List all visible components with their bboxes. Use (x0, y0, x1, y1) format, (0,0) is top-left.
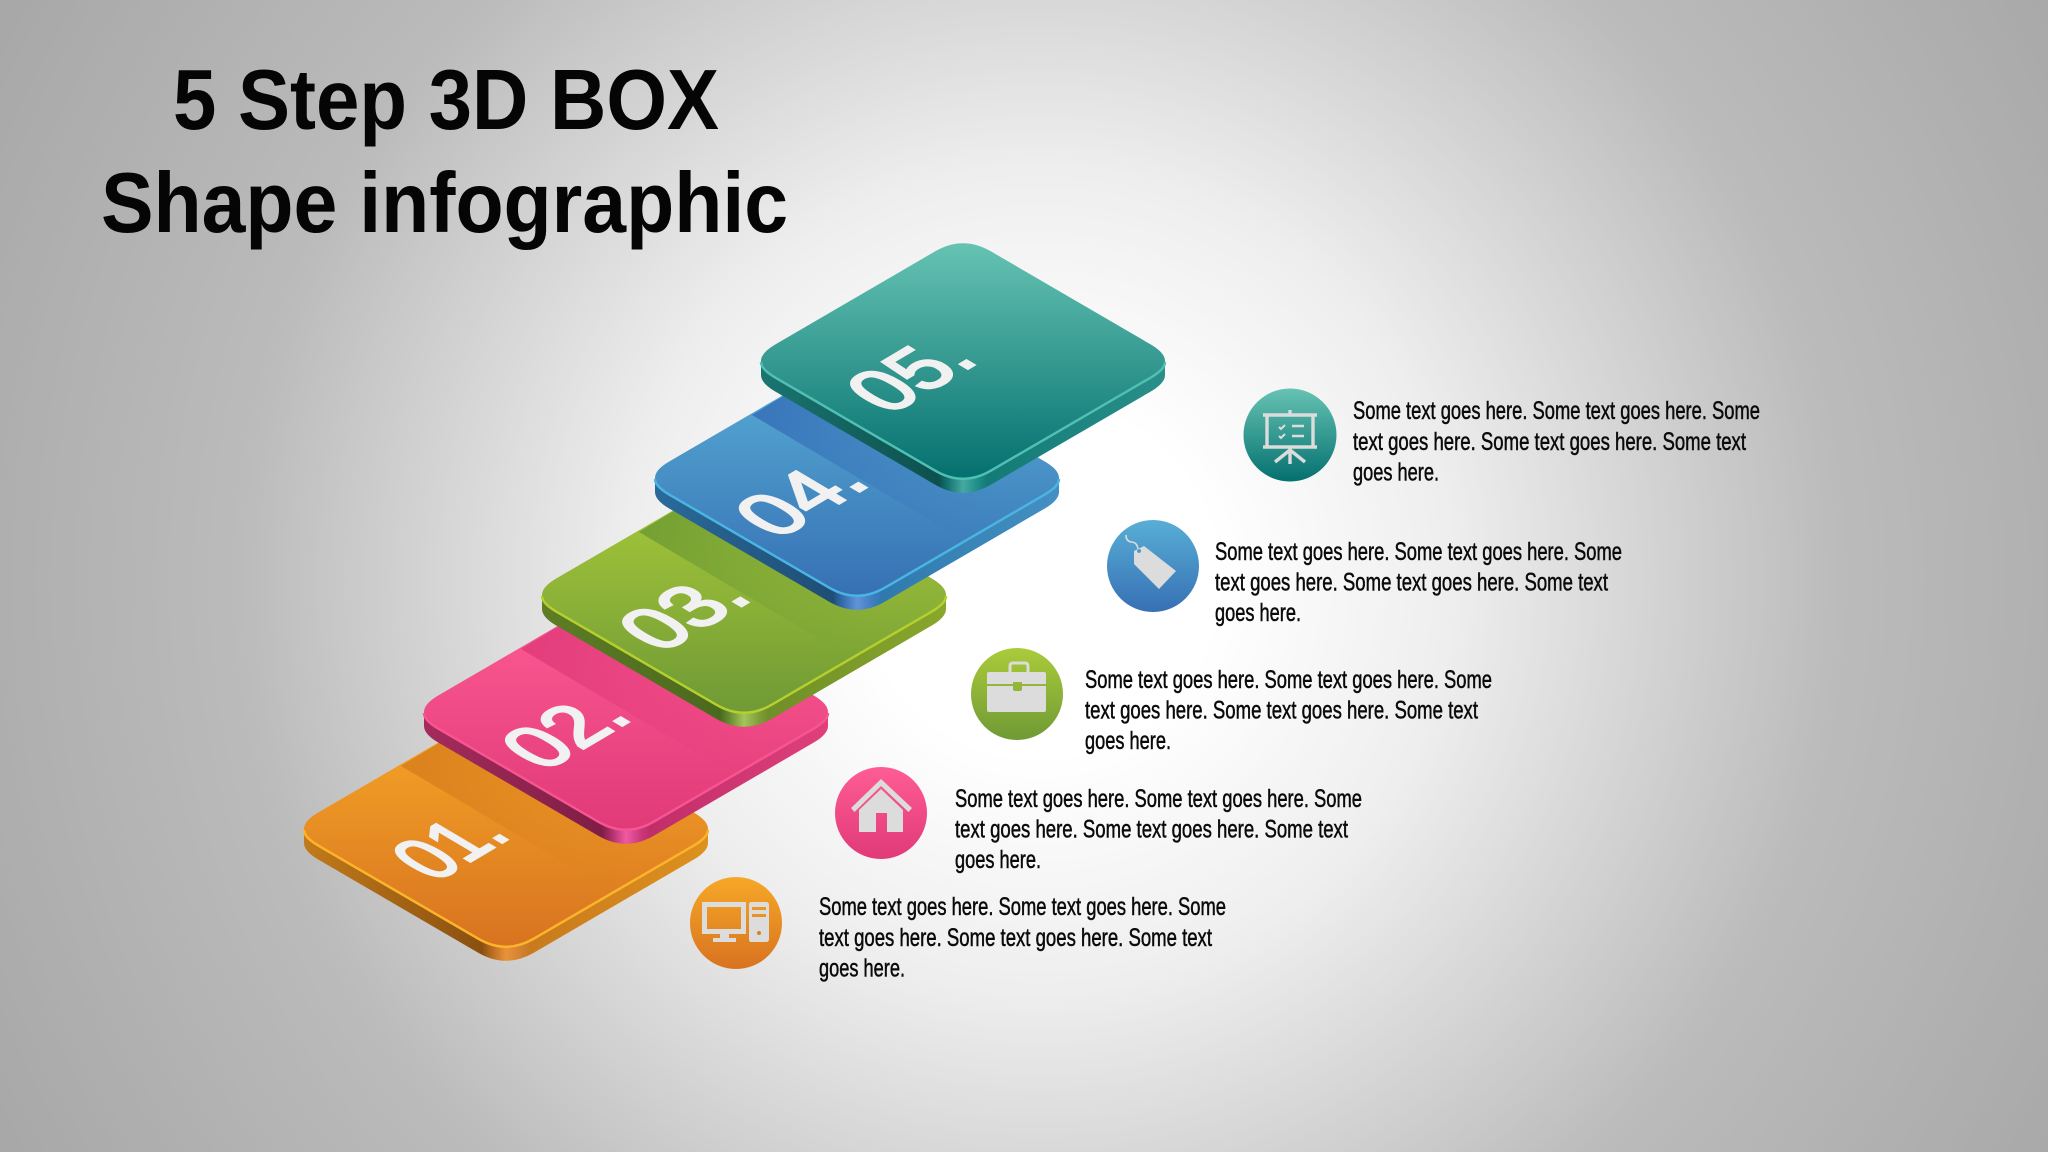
box: step 02: 02. (481, 681, 650, 781)
text: step 03: text goes here. Some text goes here. Some text (1085, 696, 1478, 724)
text: step 02: goes here. (955, 846, 1041, 874)
text: step 03 (1085, 666, 1492, 755)
box: step 04: 04. (715, 447, 888, 549)
text: step 02 (955, 785, 1362, 874)
text: step 01: Some text goes here. Some text goes here. Some (819, 893, 1226, 921)
title (101, 53, 788, 251)
text: step 02: Some text goes here. Some text goes here. Some (955, 785, 1362, 813)
title: Shape infographic (101, 156, 788, 251)
text: step 03: goes here. (1085, 727, 1171, 755)
icon: price tag (1107, 520, 1199, 612)
text: step 05: Some text goes here. Some text goes here. Some (1353, 397, 1760, 425)
text: step 01 (819, 893, 1226, 982)
box: step 02 (424, 594, 828, 844)
icon: presentation board (1244, 388, 1336, 482)
text: step 02: text goes here. Some text goes here. Some text (955, 816, 1348, 844)
box: step 03: 03. (598, 561, 769, 663)
box: step 01: 01. (372, 799, 528, 892)
title: 5 Step 3D BOX (173, 53, 719, 148)
text: step 04: goes here. (1215, 599, 1301, 627)
box: step 05 (761, 243, 1165, 493)
box: step 05: 05. (826, 324, 996, 425)
text: step 05 (1353, 397, 1760, 486)
box: step 01 (304, 711, 708, 961)
box: step 04 (655, 360, 1059, 610)
icon: house (835, 767, 927, 859)
text: step 05: text goes here. Some text goes here. Some text (1353, 428, 1746, 456)
text: step 01: text goes here. Some text goes here. Some text (819, 924, 1212, 952)
text: step 04: text goes here. Some text goes here. Some text (1215, 568, 1608, 596)
text: step 03: Some text goes here. Some text goes here. Some (1085, 666, 1492, 694)
icon: briefcase (971, 648, 1063, 740)
text: step 04 (1215, 538, 1622, 627)
box: step 03 (542, 477, 946, 727)
text: step 05: goes here. (1353, 458, 1439, 486)
text: step 01: goes here. (819, 954, 905, 982)
icon: computer (690, 877, 782, 969)
text: step 04: Some text goes here. Some text goes here. Some (1215, 538, 1622, 566)
